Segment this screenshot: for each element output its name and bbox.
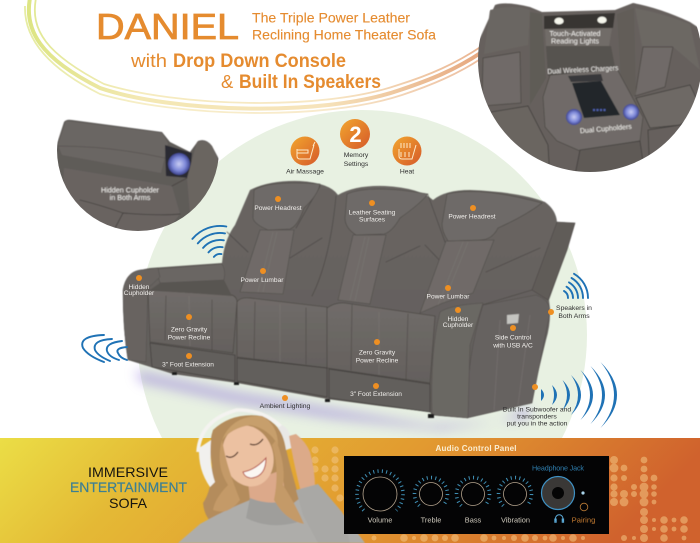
back cushion 1 xyxy=(240,230,294,294)
headband xyxy=(198,410,286,452)
speakers in both arms: Both Arms xyxy=(558,313,590,320)
right back wing xyxy=(674,46,675,47)
right arm side xyxy=(467,295,550,418)
arm base xyxy=(57,119,218,224)
leather seating surfaces: Leather Seating xyxy=(349,210,396,216)
power headrest left: Power Headrest xyxy=(254,205,302,212)
audio control panel xyxy=(344,456,609,534)
smile xyxy=(243,458,266,478)
background green circle xyxy=(137,110,587,543)
reading light canopy xyxy=(544,13,615,29)
foot extension right: 3" Foot Extension xyxy=(350,391,402,398)
collar xyxy=(246,498,298,525)
side control: Side Control xyxy=(495,334,532,342)
volume knob xyxy=(357,471,403,524)
headphone jack label: Headphone Jack xyxy=(532,464,584,472)
title: DANIEL: DANIEL xyxy=(96,6,239,47)
arm top cushion xyxy=(58,121,168,173)
hidden cupholder left: Cupholder xyxy=(124,290,155,297)
volume knob: Volume xyxy=(368,516,392,524)
callout circle: console detail xyxy=(470,3,700,180)
subtitle line 2: Reclining Home Theater Sofa xyxy=(252,28,437,42)
power headrest right: Power Headrest xyxy=(448,214,496,220)
left seat xyxy=(490,105,550,164)
zero gravity right xyxy=(356,339,399,364)
bottom banner xyxy=(0,438,700,543)
side control xyxy=(507,314,519,324)
reading light left xyxy=(554,18,564,24)
built in subwoofer: transponders xyxy=(517,414,557,420)
leather seating surfaces: Surfaces xyxy=(359,216,386,224)
icon: headphones xyxy=(555,515,564,522)
right seat xyxy=(636,85,700,128)
foot extension left xyxy=(162,353,214,368)
equalizer dots xyxy=(311,446,688,542)
console front xyxy=(575,140,644,171)
vibration knob xyxy=(499,478,532,524)
seat 3 xyxy=(327,303,435,383)
seat seams xyxy=(80,178,187,232)
icon: memory settings: Settings xyxy=(344,161,369,168)
back wing 3 xyxy=(482,248,540,305)
headphone jack xyxy=(542,476,574,510)
heading line 3: SOFA xyxy=(109,495,148,511)
right back panel xyxy=(635,47,673,96)
headline drop down console: Drop Down Console xyxy=(173,51,346,72)
label hidden cupholder xyxy=(101,186,160,202)
power headrest left xyxy=(254,196,302,212)
hidden cupholder right: Hidden xyxy=(448,316,469,323)
feature icons xyxy=(286,119,422,176)
left back panel xyxy=(482,52,521,106)
hair back xyxy=(203,415,308,528)
side back panel xyxy=(532,222,575,300)
bass knob xyxy=(457,478,489,524)
sofa silhouette xyxy=(123,181,575,418)
side control: with USB A/C xyxy=(492,342,533,350)
heading line 2: ENTERTAINMENT xyxy=(70,479,187,495)
charger screen xyxy=(572,81,620,118)
right arm front xyxy=(432,303,483,418)
built in subwoofer xyxy=(503,384,571,428)
headline built in speakers: Built In Speakers xyxy=(239,72,381,93)
side control xyxy=(492,325,533,350)
right ear cup xyxy=(278,425,292,450)
built in subwoofer: put you in the action xyxy=(507,420,568,428)
headrest 1 xyxy=(253,183,320,230)
canopy panel xyxy=(545,28,612,46)
vibration knob: Vibration xyxy=(501,516,530,524)
seat 2 xyxy=(237,298,327,368)
inner console back xyxy=(546,46,616,76)
heading line 1: IMMERSIVE xyxy=(88,464,168,480)
left arm top xyxy=(156,264,225,283)
sofa xyxy=(123,181,575,418)
status dot xyxy=(581,491,585,495)
power lumbar right: Power Lumbar xyxy=(427,294,470,300)
label reading lights: Reading Lights xyxy=(551,36,599,46)
console body xyxy=(543,69,643,151)
label reading lights: Touch-Activated xyxy=(549,29,601,38)
front panel xyxy=(64,168,179,231)
speakers in both arms: Speakers in xyxy=(556,305,592,312)
woman with headphones xyxy=(178,410,365,543)
left ear cup xyxy=(199,440,215,487)
treble knob: Treble xyxy=(421,516,441,524)
hidden cupholder left: Hidden xyxy=(129,284,150,291)
left back headrest xyxy=(488,8,494,18)
icon: memory settings: 2 xyxy=(349,122,362,147)
lit cupholder xyxy=(168,153,190,175)
back cushion 2 xyxy=(338,235,386,304)
sofa feature labels xyxy=(124,196,592,428)
screen indicators xyxy=(593,109,607,111)
feet xyxy=(172,372,434,418)
far arm xyxy=(187,141,220,214)
left arm front xyxy=(123,268,160,362)
hidden cupholder right: Cupholder xyxy=(443,322,474,329)
icon: air massage: Air Massage xyxy=(286,168,324,176)
zero gravity left: Zero Gravity xyxy=(171,326,208,334)
ambient lighting xyxy=(260,395,311,410)
icon: memory settings: Memory xyxy=(344,152,369,159)
label hidden cupholder: Hidden Cupholder xyxy=(101,186,160,194)
zero gravity left: Power Recline xyxy=(168,334,211,342)
zero gravity right: Power Recline xyxy=(356,358,399,364)
title block xyxy=(96,6,437,93)
headrest 3 xyxy=(442,191,542,241)
ambient lighting: Ambient Lighting xyxy=(260,403,311,410)
hair front xyxy=(222,416,278,445)
hidden cupholder right xyxy=(443,307,474,329)
zero gravity left xyxy=(168,314,211,342)
hand and forearm xyxy=(289,434,315,492)
callout circle: hidden cupholder xyxy=(57,119,218,231)
audio control panel heading: Audio Control Panel xyxy=(436,444,516,453)
back cushion 3 xyxy=(420,240,494,313)
decorative swoosh xyxy=(25,0,482,113)
speakers in both arms xyxy=(548,305,592,320)
cupholder left xyxy=(566,109,582,125)
eyes xyxy=(226,439,263,457)
subtitle line 1: The Triple Power Leather xyxy=(252,10,411,26)
bass knob: Bass xyxy=(465,516,482,524)
sound waves: subwoofer xyxy=(541,362,617,428)
banner heading xyxy=(70,464,187,511)
label reading lights xyxy=(549,29,601,46)
sound waves: left xyxy=(82,335,127,362)
foot extension left: 3" Foot Extension xyxy=(162,362,214,368)
sound waves: right arm xyxy=(564,274,588,298)
sleeve xyxy=(296,484,350,543)
hidden cupholder left xyxy=(124,275,155,297)
foot extension right xyxy=(350,383,402,398)
power lumbar right xyxy=(427,285,470,300)
treble knob xyxy=(414,478,447,524)
back wing 2 xyxy=(312,195,445,296)
face xyxy=(215,419,281,493)
panel background xyxy=(344,456,609,534)
headline with: with xyxy=(130,50,167,71)
ambient light glow xyxy=(135,370,530,430)
pairing label: Pairing xyxy=(572,516,595,524)
headline ampersand: & xyxy=(221,71,234,92)
charger slot xyxy=(568,74,603,82)
icon: memory settings xyxy=(340,119,370,168)
back wing 1 xyxy=(227,186,322,258)
label dual cupholders: Dual Cupholders xyxy=(579,122,632,135)
pairing button xyxy=(580,503,588,511)
cupholder right xyxy=(623,104,639,120)
label wireless chargers: Dual Wireless Chargers xyxy=(547,63,619,76)
power lumbar left: Power Lumbar xyxy=(241,277,284,284)
zero gravity right: Zero Gravity xyxy=(359,350,396,356)
footrest 1 xyxy=(150,343,235,381)
sound waves: upper left xyxy=(192,226,226,257)
cupholder well xyxy=(165,145,192,178)
built in subwoofer: Built In Subwoofer and xyxy=(503,406,571,414)
console sofa base xyxy=(470,3,700,180)
neck xyxy=(248,470,286,507)
headrest 2 xyxy=(345,189,428,235)
footrest 2 xyxy=(237,358,327,397)
power headrest right xyxy=(448,205,496,220)
power lumbar left xyxy=(241,268,284,284)
icon: heat: Heat xyxy=(400,168,414,176)
reading light right xyxy=(597,17,607,23)
leather seating surfaces xyxy=(349,200,396,224)
sweater xyxy=(178,490,365,543)
seat 1 xyxy=(148,290,237,353)
label hidden cupholder: in Both Arms xyxy=(110,193,151,202)
footrest 3 xyxy=(329,369,430,412)
